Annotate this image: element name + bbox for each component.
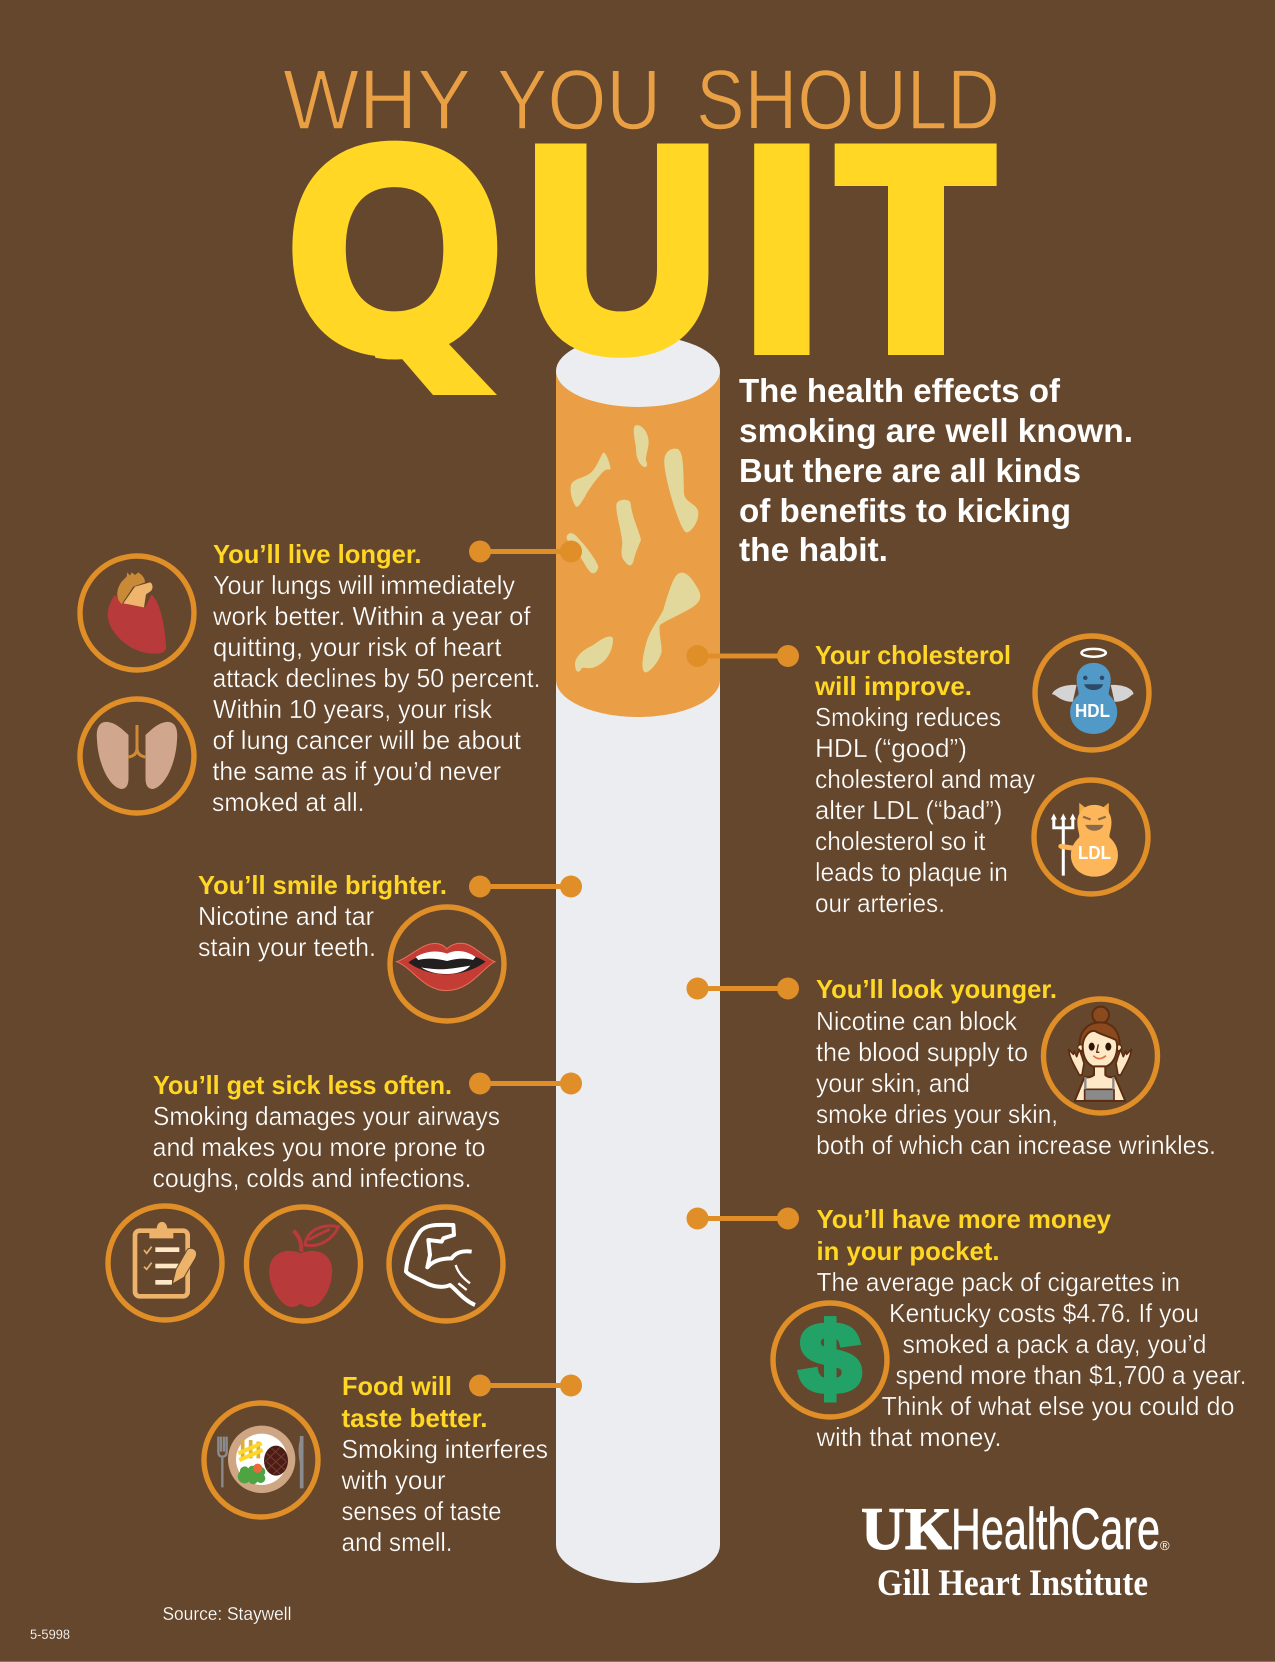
icon: LDL devil: LDL (1078, 843, 1111, 863)
intro text: But there are all kinds (739, 453, 1081, 490)
connector: look younger (686, 978, 799, 1000)
icon: dollar sign (773, 1303, 887, 1417)
text block: look younger: You’ll look younger. (816, 974, 1057, 1004)
text block: live longer: Within 10 years, your risk (213, 694, 493, 724)
connector: more money (686, 1208, 799, 1230)
icon: smiling mouth (390, 907, 504, 1021)
text block: more money: Think of what else you could do (882, 1391, 1234, 1421)
connector: smile brighter (469, 876, 582, 898)
text block: sick less often: You’ll get sick less often. (153, 1070, 452, 1100)
text block: live longer: You’ll live longer. (213, 539, 422, 569)
title word: quit (292, 140, 997, 395)
title word: quit: I (742, 88, 822, 409)
text block: smile brighter: You’ll smile brighter. (198, 870, 447, 900)
title line: why you should (283, 53, 1000, 148)
text block: live longer: work better. Within a year of (212, 601, 531, 631)
logo: UK HealthCare: HealthCare (951, 1497, 1160, 1562)
intro text: of benefits to kicking (739, 493, 1071, 530)
text block: food tastes better (341, 1371, 548, 1557)
cigarette filter (556, 371, 720, 717)
text block: sick less often: coughs, colds and infections. (152, 1163, 472, 1193)
logo: Gill Heart Institute: Gill Heart Institute (877, 1563, 1148, 1604)
filter top end (556, 335, 720, 407)
text block: more money: The average pack of cigarettes in (816, 1267, 1180, 1297)
text block: smile brighter: Nicotine and tar (198, 901, 374, 931)
icon: flexed muscle (389, 1207, 503, 1321)
intro text (739, 373, 1133, 569)
text block: live longer: the same as if you’d never (212, 756, 501, 786)
title word: quit: Q (288, 88, 502, 409)
intro text: smoking are well known. (739, 413, 1133, 450)
title word: quit: U (526, 88, 718, 409)
text block: more money: Kentucky costs $4.76. If you (889, 1298, 1199, 1328)
text block: food tastes better: senses of taste (342, 1496, 502, 1526)
title word: quit: T (838, 90, 993, 409)
text block: food tastes better: Smoking interferes (342, 1434, 548, 1464)
title line: why you should: SHOULD (696, 53, 1000, 148)
text block: live longer: attack declines by 50 percent. (212, 663, 540, 693)
icon: LDL devil (1034, 780, 1148, 894)
text block: cholesterol: Your cholesterol (815, 640, 1011, 670)
icon: lungs (80, 699, 194, 813)
connector: sick less often (469, 1072, 582, 1094)
title line: why you should: YOU (497, 53, 661, 148)
text block: look younger: the blood supply to (816, 1037, 1028, 1067)
text block: live longer: quitting, your risk of heart (213, 632, 502, 662)
cigarette (556, 335, 720, 1583)
text block: smile brighter (198, 870, 447, 962)
icon: dollar sign: $ (799, 1304, 861, 1414)
text block: sick less often: and makes you more prone to (152, 1132, 486, 1162)
cigarette body (556, 680, 720, 1583)
text block: live longer (212, 539, 540, 817)
text block: more money: smoked a pack a day, you’d (902, 1329, 1206, 1359)
text block: look younger: both of which can increase wrinkles. (816, 1130, 1216, 1160)
connector: cholesterol (686, 645, 799, 667)
icon: smiling woman (1044, 999, 1158, 1113)
connector: live longer (469, 540, 582, 562)
text block: cholesterol: HDL (“good”) (815, 733, 967, 763)
text block: food tastes better: Food will (342, 1371, 452, 1401)
text block: live longer: of lung cancer will be about (212, 725, 522, 755)
icon: dinner plate (204, 1403, 318, 1517)
intro text: The health effects of (739, 373, 1061, 410)
text block: cholesterol: leads to plaque in (815, 857, 1008, 887)
connector: food tastes better (469, 1374, 582, 1396)
text block: food tastes better: taste better. (342, 1403, 488, 1433)
text block: more money: in your pocket. (816, 1236, 1000, 1266)
text block: cholesterol: alter LDL (“bad”) (815, 795, 1002, 825)
logo: UK HealthCare: ® (1160, 1538, 1170, 1553)
icon: HDL angel: HDL (1075, 701, 1110, 721)
title line: why you should: WHY (283, 53, 471, 148)
text block: live longer: Your lungs will immediately (213, 570, 515, 600)
source note: Source: Staywell (162, 1604, 292, 1624)
text block: cholesterol: Smoking reduces (815, 702, 1001, 732)
text block: look younger: Nicotine can block (816, 1006, 1018, 1036)
text block: food tastes better: and smell. (342, 1527, 452, 1557)
icon: HDL angel (1035, 636, 1149, 750)
text block: live longer: smoked at all. (212, 787, 364, 817)
text block: cholesterol: cholesterol so it (815, 826, 986, 856)
text block: look younger: smoke dries your skin, (816, 1099, 1058, 1129)
logo: UK HealthCare: UK (861, 1496, 952, 1562)
icon: clipboard checklist (108, 1206, 222, 1320)
text block: cholesterol: cholesterol and may (815, 764, 1035, 794)
text block: sick less often: Smoking damages your airways (153, 1101, 500, 1131)
title (283, 53, 1000, 409)
intro text: the habit. (739, 532, 888, 569)
text block: sick less often (152, 1070, 500, 1193)
filter specks (567, 425, 700, 672)
text block: look younger (816, 974, 1216, 1160)
text block: more money (816, 1204, 1246, 1452)
text block: smile brighter: stain your teeth. (198, 932, 376, 962)
text block: look younger: your skin, and (816, 1068, 970, 1098)
logo: UK HealthCare (861, 1496, 1170, 1604)
text block: food tastes better: with your (341, 1465, 446, 1495)
text block: more money: with that money. (816, 1422, 1002, 1452)
text block: cholesterol: our arteries. (815, 888, 945, 918)
text block: more money: You’ll have more money (816, 1204, 1112, 1234)
text block: more money: spend more than $1,700 a year. (896, 1360, 1246, 1390)
document code: 5-5998 (30, 1626, 70, 1642)
text block: cholesterol (814, 640, 1035, 918)
icon: heart (80, 556, 194, 670)
icon: apple (246, 1207, 360, 1321)
text block: cholesterol: will improve. (814, 671, 972, 701)
